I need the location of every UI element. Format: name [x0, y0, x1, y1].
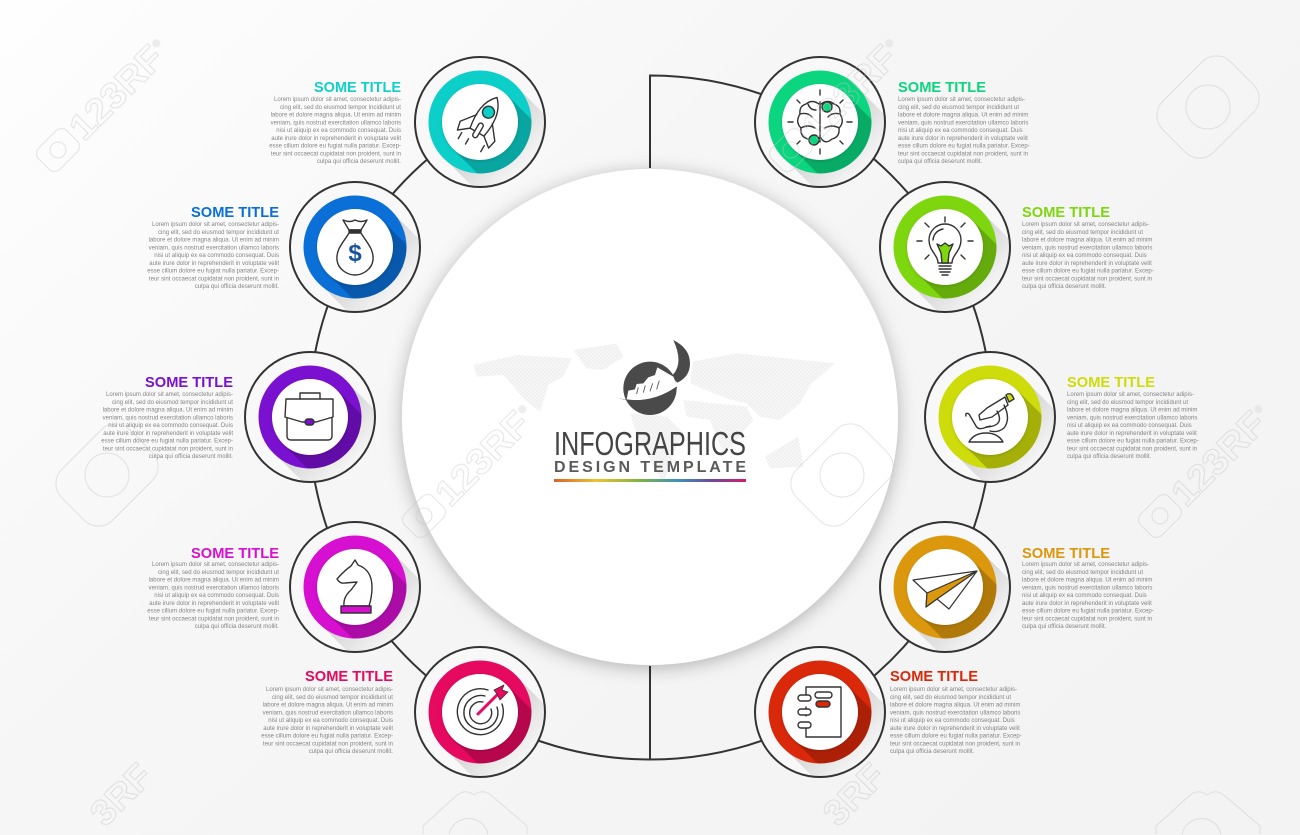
body text: cing elit, sed do eiusmod tempor incididunt ut — [158, 230, 279, 236]
body text: esse cillum dolore eu fugiat nulla pariatur. Excep- — [147, 608, 279, 614]
subtitle: DESIGN TEMPLATE — [554, 459, 746, 476]
body text: labore et dolore magna aliqua. Ut enim ad minim — [1022, 238, 1152, 244]
body text: labore et dolore magna aliqua. Ut enim ad minim — [263, 702, 393, 708]
body text: culpa qui officia deserunt mollit. — [195, 284, 279, 290]
body text: culpa qui officia deserunt mollit. — [195, 624, 279, 630]
icon: paper plane — [913, 571, 977, 609]
body text: esse cillum dolore eu fugiat nulla pariatur. Excep- — [1067, 438, 1199, 444]
node 9: paper plane — [879, 521, 1011, 653]
body text: nisi ut aliquip ex ea commodo consequat. Duis — [1067, 423, 1192, 429]
heading: SOME TITLE — [1022, 545, 1110, 562]
body text: Lorem ipsum dolor sit amet, consectetur adipis- — [106, 392, 233, 398]
central white circle — [402, 169, 898, 665]
body text: cing elit, sed do eiusmod tempor incididunt ut — [158, 570, 279, 576]
body text: esse cillum dolore eu fugiat nulla pariatur. Excep- — [261, 734, 393, 740]
body text: culpa qui officia deserunt mollit. — [898, 159, 983, 165]
body text: cing elit, sed do eiusmod tempor incididunt ut — [1067, 400, 1188, 406]
body text: teur sint occaecat cupidatat non proident, sunt in — [890, 741, 1020, 747]
body text: Lorem ipsum dolor sit amet, consectetur adipis- — [1022, 562, 1149, 568]
body text: nisi ut aliquip ex ea commodo consequat. Duis — [898, 128, 1023, 134]
body text: labore et dolore magna aliqua. Ut enim ad minim — [1022, 578, 1152, 584]
text block 5 — [261, 668, 393, 755]
heading: SOME TITLE — [1067, 374, 1155, 391]
body text: teur sint occaecat cupidatat non proident, sunt in — [1022, 616, 1152, 622]
body text: nisi ut aliquip ex ea commodo consequat. Duis — [276, 128, 401, 134]
body text: nisi ut aliquip ex ea commodo consequat. Duis — [268, 718, 393, 724]
body text: veniam, quis nostrud exercitation ullamco laboris — [898, 120, 1028, 126]
text block 6 — [898, 79, 1030, 165]
icon: chess knight — [337, 560, 372, 613]
icon: briefcase — [285, 393, 333, 440]
dotted world map — [473, 343, 835, 483]
body text: labore et dolore magna aliqua. Ut enim ad minim — [271, 112, 401, 118]
heading: SOME TITLE — [1022, 204, 1110, 221]
body text: cing elit, sed do eiusmod tempor incididunt ut — [272, 695, 393, 701]
body text: cing elit, sed do eiusmod tempor incididunt ut — [1022, 570, 1143, 576]
node 10: notebook — [754, 646, 886, 778]
heading: SOME TITLE — [890, 668, 978, 685]
body text: teur sint occaecat cupidatat non proident, sunt in — [1022, 276, 1152, 282]
node 3: briefcase — [244, 351, 376, 483]
heading: SOME TITLE — [191, 204, 279, 221]
body text: cing elit, sed do eiusmod tempor incididunt ut — [1022, 230, 1143, 236]
body text: aute irure dolor in reprehenderit in voluptate velit — [103, 431, 233, 437]
body text: veniam, quis nostrud exercitation ullamco laboris — [890, 710, 1020, 716]
node 1: rocket — [414, 56, 546, 188]
body text: teur sint occaecat cupidatat non proident, sunt in — [149, 616, 279, 622]
body text: teur sint occaecat cupidatat non proident, sunt in — [149, 276, 279, 282]
body text: Lorem ipsum dolor sit amet, consectetur adipis- — [898, 97, 1025, 103]
rainbow bar — [554, 479, 746, 482]
text block 2 — [147, 204, 279, 290]
icon: microscope — [966, 394, 1014, 442]
body text: labore et dolore magna aliqua. Ut enim ad minim — [1067, 408, 1197, 414]
main title: INFOGRAPHICS — [554, 425, 746, 462]
text: 3RF — [815, 755, 893, 834]
body text: nisi ut aliquip ex ea commodo consequat. Duis — [1022, 253, 1147, 259]
heading: SOME TITLE — [898, 79, 986, 96]
body text: culpa qui officia deserunt mollit. — [149, 454, 233, 460]
body text: nisi ut aliquip ex ea commodo consequat. Duis — [108, 423, 233, 429]
text block 8 — [1067, 374, 1199, 460]
text block 10 — [890, 668, 1022, 755]
body text: cing elit, sed do eiusmod tempor incididunt ut — [280, 105, 401, 111]
icon: target with arrow — [457, 685, 508, 735]
body text: Lorem ipsum dolor sit amet, consectetur adipis- — [890, 687, 1017, 693]
body text: culpa qui officia deserunt mollit. — [1022, 284, 1107, 290]
body text: teur sint occaecat cupidatat non proident, sunt in — [103, 446, 233, 452]
body text: Lorem ipsum dolor sit amet, consectetur adipis- — [152, 222, 279, 228]
icon: light bulb — [917, 217, 973, 275]
text: 3RF — [82, 755, 160, 834]
icon: money bag — [337, 220, 373, 275]
body text: aute irure dolor in reprehenderit in voluptate velit — [149, 601, 279, 607]
body text: nisi ut aliquip ex ea commodo consequat. Duis — [890, 718, 1015, 724]
central logo mark — [616, 340, 690, 415]
icon: rocket — [452, 87, 514, 156]
body text: nisi ut aliquip ex ea commodo consequat. Duis — [154, 593, 279, 599]
body text: teur sint occaecat cupidatat non proident, sunt in — [1067, 446, 1197, 452]
body text: labore et dolore magna aliqua. Ut enim ad minim — [890, 702, 1020, 708]
body text: aute irure dolor in reprehenderit in voluptate velit — [898, 136, 1028, 142]
body text: aute irure dolor in reprehenderit in voluptate velit — [890, 726, 1020, 732]
node 2: money bag — [289, 181, 421, 313]
body text: veniam, quis nostrud exercitation ullamco laboris — [271, 120, 401, 126]
body text: esse cillum dolore eu fugiat nulla pariatur. Excep- — [1022, 268, 1154, 274]
node 5: target — [414, 646, 546, 778]
icon: notebook — [798, 687, 841, 737]
body text: Lorem ipsum dolor sit amet, consectetur adipis- — [1022, 222, 1149, 228]
body text: labore et dolore magna aliqua. Ut enim ad minim — [103, 408, 233, 414]
body text: cing elit, sed do eiusmod tempor incididunt ut — [112, 400, 233, 406]
text: 123RF — [794, 37, 905, 148]
body text: Lorem ipsum dolor sit amet, consectetur adipis- — [274, 97, 401, 103]
heading: SOME TITLE — [305, 668, 393, 685]
icon: dollar sign: $ — [348, 240, 362, 267]
text block 9 — [1022, 545, 1154, 630]
body text: veniam, quis nostrud exercitation ullamco laboris — [263, 710, 393, 716]
body text: aute irure dolor in reprehenderit in voluptate velit — [271, 136, 401, 142]
body text: culpa qui officia deserunt mollit. — [1022, 624, 1107, 630]
body text: teur sint occaecat cupidatat non proident, sunt in — [271, 151, 401, 157]
body text: aute irure dolor in reprehenderit in voluptate velit — [1067, 431, 1197, 437]
body text: esse cillum dolore eu fugiat nulla pariatur. Excep- — [890, 734, 1022, 740]
heading: SOME TITLE — [314, 79, 401, 96]
body text: esse cillum dolore eu fugiat nulla pariatur. Excep- — [101, 438, 233, 444]
text block 4 — [147, 545, 279, 630]
body text: teur sint occaecat cupidatat non proident, sunt in — [898, 151, 1028, 157]
body text: culpa qui officia deserunt mollit. — [1067, 454, 1152, 460]
body text: culpa qui officia deserunt mollit. — [890, 749, 975, 755]
node 6: brain — [754, 56, 886, 188]
body text: esse cillum dolore eu fugiat nulla pariatur. Excep- — [898, 144, 1030, 150]
body text: culpa qui officia deserunt mollit. — [309, 749, 393, 755]
body text: aute irure dolor in reprehenderit in voluptate velit — [1022, 601, 1152, 607]
body text: veniam, quis nostrud exercitation ullamco laboris — [149, 245, 279, 251]
body text: Lorem ipsum dolor sit amet, consectetur adipis- — [266, 687, 393, 693]
body text: teur sint occaecat cupidatat non proident, sunt in — [263, 741, 393, 747]
body text: nisi ut aliquip ex ea commodo consequat. Duis — [1022, 593, 1147, 599]
body text: labore et dolore magna aliqua. Ut enim ad minim — [898, 112, 1028, 118]
node 4: chess knight — [289, 521, 421, 653]
body text: aute irure dolor in reprehenderit in voluptate velit — [149, 261, 279, 267]
body text: veniam, quis nostrud exercitation ullamco laboris — [1022, 585, 1152, 591]
body text: veniam, quis nostrud exercitation ullamco laboris — [1022, 245, 1152, 251]
node 8: microscope — [924, 351, 1056, 483]
body text: Lorem ipsum dolor sit amet, consectetur adipis- — [152, 562, 279, 568]
text block 3 — [101, 374, 233, 460]
body text: esse cillum dolore eu fugiat nulla pariatur. Excep- — [1022, 608, 1154, 614]
heading: SOME TITLE — [191, 545, 279, 562]
node 7: light bulb — [879, 181, 1011, 313]
text: 123RF — [427, 403, 538, 514]
body text: aute irure dolor in reprehenderit in voluptate velit — [263, 726, 393, 732]
body text: Lorem ipsum dolor sit amet, consectetur adipis- — [1067, 392, 1194, 398]
text block 1 — [269, 79, 401, 165]
body text: esse cillum dolore eu fugiat nulla pariatur. Excep- — [147, 268, 279, 274]
body text: labore et dolore magna aliqua. Ut enim ad minim — [149, 238, 279, 244]
body text: labore et dolore magna aliqua. Ut enim ad minim — [149, 578, 279, 584]
body text: aute irure dolor in reprehenderit in voluptate velit — [1022, 261, 1152, 267]
connecting timeline arc — [309, 76, 992, 760]
text: 123RF — [1163, 403, 1274, 514]
body text: veniam, quis nostrud exercitation ullamco laboris — [103, 415, 233, 421]
body text: veniam, quis nostrud exercitation ullamco laboris — [149, 585, 279, 591]
body text: cing elit, sed do eiusmod tempor incididunt ut — [898, 105, 1019, 111]
text block 7 — [1022, 204, 1154, 290]
heading: SOME TITLE — [145, 374, 233, 391]
body text: culpa qui officia deserunt mollit. — [317, 159, 401, 165]
body text: cing elit, sed do eiusmod tempor incididunt ut — [890, 695, 1011, 701]
icon: brain — [788, 90, 852, 154]
body text: veniam, quis nostrud exercitation ullamco laboris — [1067, 415, 1197, 421]
text: 123RF — [61, 37, 172, 148]
body text: nisi ut aliquip ex ea commodo consequat. Duis — [154, 253, 279, 259]
body text: esse cillum dolore eu fugiat nulla pariatur. Excep- — [269, 144, 401, 150]
